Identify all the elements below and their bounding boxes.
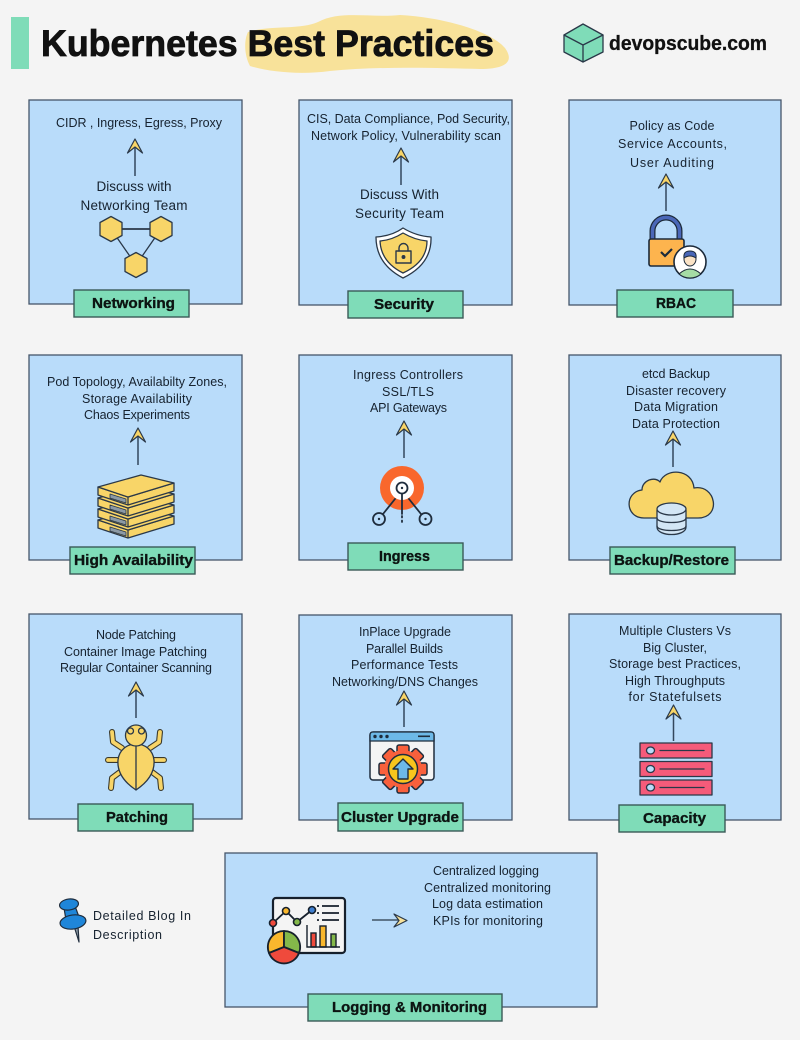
label [610, 547, 735, 574]
label [348, 543, 463, 570]
panel: networking [29, 100, 242, 317]
topics text: Data Migration [634, 400, 718, 414]
panel: high availability [29, 355, 242, 574]
topics text: for Statefulsets [628, 690, 722, 704]
panel box [569, 355, 781, 560]
label: Cluster Upgrade [341, 809, 459, 826]
logo cube [564, 24, 603, 62]
icon: network hexagons [100, 216, 172, 278]
label: RBAC [656, 295, 696, 312]
label: High Availability [74, 552, 194, 569]
label [78, 804, 193, 831]
label [74, 290, 189, 317]
label: Patching [106, 809, 168, 826]
title: Kubernetes Best Practices [41, 23, 494, 64]
topics text: Policy as Code [630, 119, 715, 133]
discuss text: Discuss With [360, 187, 439, 202]
topics text: Centralized monitoring [424, 881, 551, 895]
panel: logging and monitoring [225, 853, 597, 1021]
topics text: Network Policy, Vulnerability scan [311, 129, 501, 143]
topics text: Log data estimation [432, 897, 543, 911]
arrow [666, 431, 680, 467]
icon: monitoring dashboard [268, 898, 345, 963]
topics text [307, 112, 510, 143]
note text: Description [93, 928, 162, 942]
topics text [60, 628, 212, 675]
accent bar [11, 17, 29, 69]
panel: patching [29, 614, 242, 831]
discuss text [355, 187, 444, 221]
icon: shield with lock [376, 228, 431, 278]
icon: window with upgrade gear [370, 732, 434, 793]
arrow [396, 421, 412, 458]
header [11, 15, 767, 73]
topics text: User Auditing [630, 156, 714, 170]
icon: push pin [59, 898, 87, 942]
topics text: Centralized logging [433, 864, 539, 878]
label [617, 290, 733, 317]
topics text: InPlace Upgrade [359, 625, 451, 639]
panel box [569, 614, 781, 820]
topics text [626, 367, 727, 431]
panel box [29, 100, 242, 304]
arrow [658, 174, 674, 211]
note: detailed blog [59, 898, 191, 942]
topics text [353, 368, 463, 415]
topics text [424, 864, 551, 928]
panel box [299, 100, 512, 305]
arrow [128, 682, 144, 718]
topics text: CIS, Data Compliance, Pod Security, [307, 112, 510, 126]
label [308, 994, 502, 1021]
icon: cloud database [629, 472, 713, 534]
topics text: Parallel Builds [366, 642, 443, 656]
discuss text [80, 179, 188, 213]
icon: padlock and user [649, 218, 706, 278]
topics text [332, 625, 478, 689]
label [619, 805, 725, 832]
label: Logging & Monitoring [332, 999, 487, 1016]
topics text: Multiple Clusters Vs [619, 624, 731, 638]
topics text: API Gateways [370, 401, 447, 415]
panel box [299, 615, 512, 820]
arrow [372, 914, 407, 927]
arrow [130, 428, 146, 465]
panel box [299, 355, 512, 560]
topics text: Ingress Controllers [353, 368, 463, 382]
label [70, 547, 195, 574]
topics text: Service Accounts, [618, 137, 727, 151]
panel box [569, 100, 781, 305]
topics text: High Throughputs [625, 674, 725, 688]
topics text [47, 375, 227, 422]
discuss text: Security Team [355, 206, 444, 221]
topics text: Chaos Experiments [84, 408, 190, 422]
label [338, 803, 463, 831]
topics text: Networking/DNS Changes [332, 675, 478, 689]
topics text: SSL/TLS [382, 385, 434, 399]
label: Capacity [643, 810, 707, 827]
discuss text: Networking Team [80, 198, 188, 213]
panel box [29, 614, 242, 819]
topics text: Pod Topology, Availabilty Zones, [47, 375, 227, 389]
topics text: Big Cluster, [643, 641, 707, 655]
topics text: Data Protection [632, 417, 720, 431]
label: Networking [92, 295, 175, 312]
panel box [225, 853, 597, 1007]
note text [93, 909, 191, 942]
icon: server racks [640, 743, 712, 795]
title highlight blob [245, 15, 509, 73]
label: Ingress [379, 548, 430, 565]
topics text: etcd Backup [642, 367, 710, 381]
topics text: Performance Tests [351, 658, 458, 672]
topics text: Regular Container Scanning [60, 661, 212, 675]
topics text: Storage best Practices, [609, 657, 741, 671]
icon: ingress routing [373, 466, 432, 525]
logo text: devopscube.com [609, 33, 767, 55]
topics text [618, 119, 727, 170]
panel: ingress [299, 355, 512, 570]
topics text: Node Patching [96, 628, 176, 642]
arrow [396, 691, 412, 727]
topics text: Disaster recovery [626, 384, 727, 398]
topics text [609, 624, 741, 704]
topics text: Storage Availability [82, 392, 193, 406]
arrow [394, 148, 408, 185]
icon: server stack [98, 475, 174, 538]
discuss text: Discuss with [96, 179, 172, 194]
icon: bug [108, 725, 164, 790]
label: Backup/Restore [614, 552, 729, 569]
panel: cluster upgrade [299, 615, 512, 831]
label: Security [374, 296, 435, 313]
note text: Detailed Blog In [93, 909, 191, 923]
topics text: CIDR , Ingress, Egress, Proxy [56, 116, 223, 130]
topics text: KPIs for monitoring [433, 914, 543, 928]
panel: security [299, 100, 512, 318]
topics text: Container Image Patching [64, 645, 207, 659]
arrow [128, 139, 142, 176]
panel: rbac [569, 100, 781, 317]
panel box [29, 355, 242, 560]
label [348, 291, 463, 318]
panel: backup restore [569, 355, 781, 574]
arrow [666, 705, 681, 741]
panel: capacity [569, 614, 781, 832]
